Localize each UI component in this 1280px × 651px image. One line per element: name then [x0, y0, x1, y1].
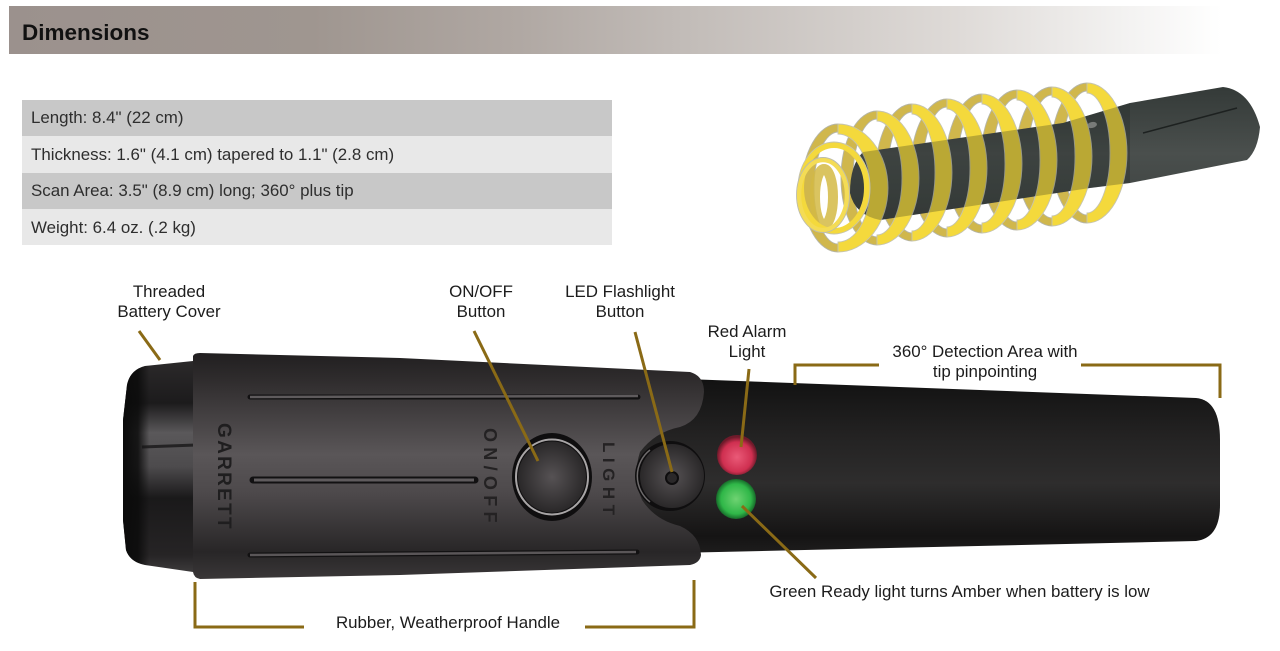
rubber handle — [193, 353, 704, 579]
leader: ON/OFF button — [474, 331, 538, 461]
leader: green ready light — [742, 506, 816, 578]
green ready light — [716, 479, 756, 519]
bracket: detection area — [795, 365, 1220, 398]
specifications table — [22, 100, 612, 245]
detector with yellow scan-area rings — [796, 83, 1260, 252]
LED flashlight button — [635, 441, 705, 511]
label: threaded battery cover: Threaded — [133, 282, 205, 301]
label: detection area: tip pinpointing — [933, 362, 1037, 381]
LIGHT label: LIGHT — [599, 442, 618, 520]
bracket: rubber handle — [195, 580, 694, 627]
label: ON/OFF button: Button — [457, 302, 505, 321]
ON/OFF label: ON/OFF — [480, 428, 500, 528]
label: ON/OFF button: ON/OFF — [449, 282, 513, 301]
label: rubber handle: Rubber, Weatherproof Handle — [336, 613, 560, 632]
specifications table: Length: 8.4" (22 cm) — [31, 108, 183, 127]
barrel with detection area — [630, 377, 1220, 554]
specifications table: Scan Area: 3.5" (8.9 cm) long; 360° plus tip — [31, 181, 354, 200]
label: threaded battery cover: Battery Cover — [117, 302, 221, 321]
label: LED flashlight button: LED Flashlight — [565, 282, 675, 301]
header bar: Dimensions — [9, 6, 1222, 54]
label: red alarm light: Light — [729, 342, 766, 361]
grip grooves — [250, 396, 638, 555]
red alarm light — [717, 435, 757, 475]
label: red alarm light: Red Alarm — [708, 322, 786, 341]
label: LED flashlight button: Button — [596, 302, 644, 321]
leader: LED flashlight button — [635, 332, 672, 472]
leader: red alarm light — [741, 369, 749, 447]
specifications table: Weight: 6.4 oz. (.2 kg) — [31, 218, 196, 237]
label: detection area: 360° Detection Area with — [892, 342, 1078, 361]
main detector body — [123, 353, 1220, 579]
ON/OFF button — [512, 433, 592, 521]
battery cover cap — [123, 361, 198, 572]
specifications table: Thickness: 1.6" (4.1 cm) tapered to 1.1" (2.8 cm) — [31, 145, 394, 164]
header bar: Dimensions: Dimensions — [22, 20, 150, 45]
label: green ready light: Green Ready light turns Amber when battery is low — [769, 582, 1150, 601]
GARRETT logo: GARRETT — [213, 423, 234, 531]
leader: threaded battery cover — [139, 331, 160, 360]
